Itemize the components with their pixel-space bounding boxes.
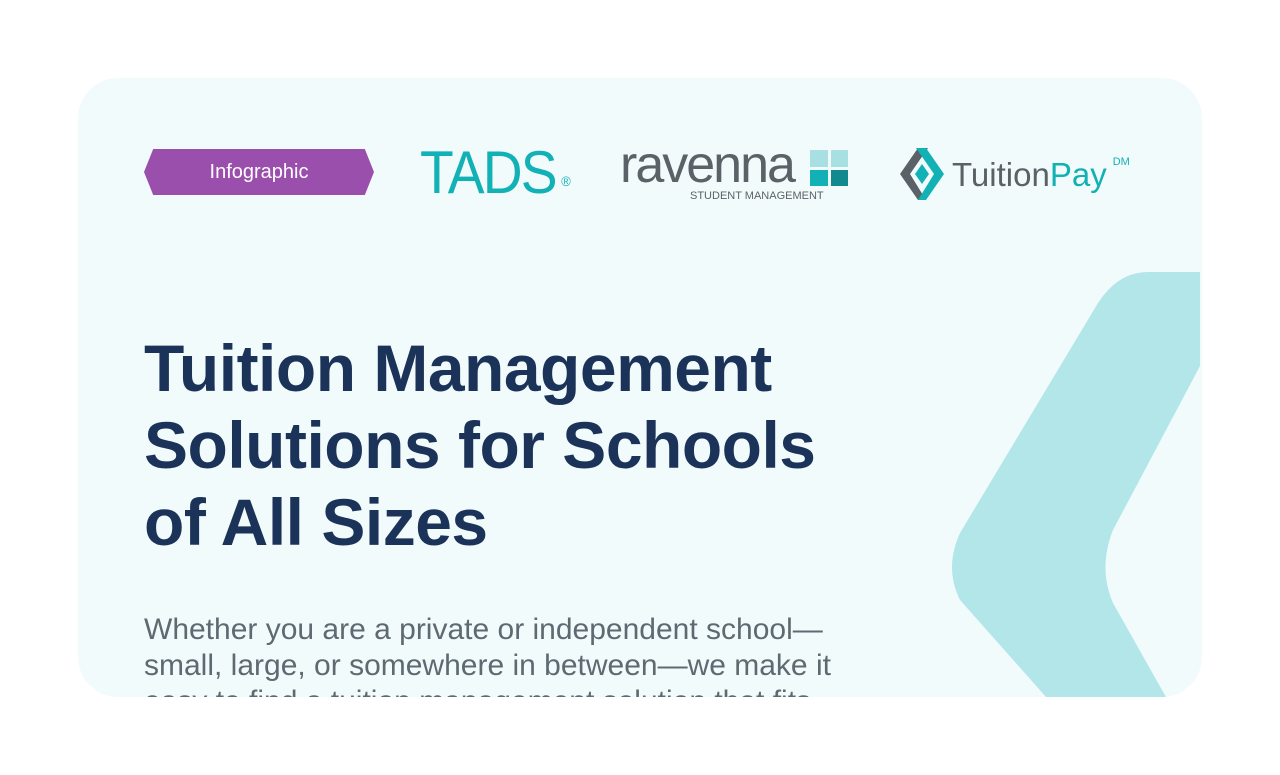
card [78,78,1202,697]
title [144,331,816,559]
badge: Infographic [144,149,374,195]
title: of All Sizes [144,485,488,559]
logo: TuitionPay: TuitionPay DM [952,156,1130,193]
logo: ravenna [620,136,848,202]
logo: TuitionPay [900,148,1130,200]
badge: Infographic: Infographic [210,161,308,183]
logo: TADS: TADS ® [420,139,569,206]
decorative chevron [952,272,1200,697]
logo: ravenna: ravenna [620,136,794,194]
title: Solutions for Schools [144,408,816,482]
logo: ravenna: STUDENT MANAGEMENT [690,190,824,202]
title: Tuition Management [144,331,772,405]
